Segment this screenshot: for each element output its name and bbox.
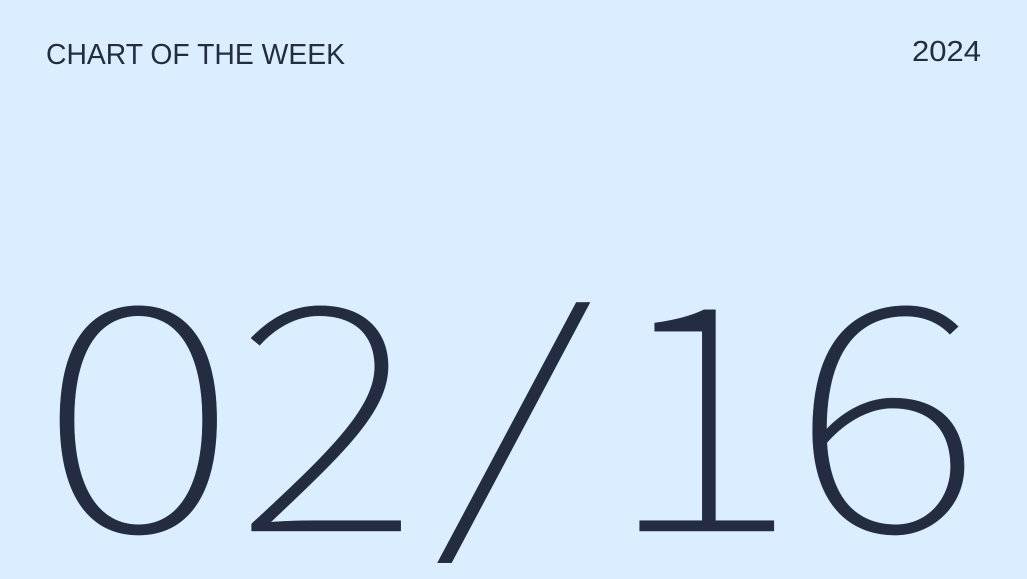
title: CHART OF THE WEEK bbox=[46, 39, 346, 71]
year: 2024 bbox=[912, 36, 981, 68]
large date bbox=[39, 167, 982, 579]
